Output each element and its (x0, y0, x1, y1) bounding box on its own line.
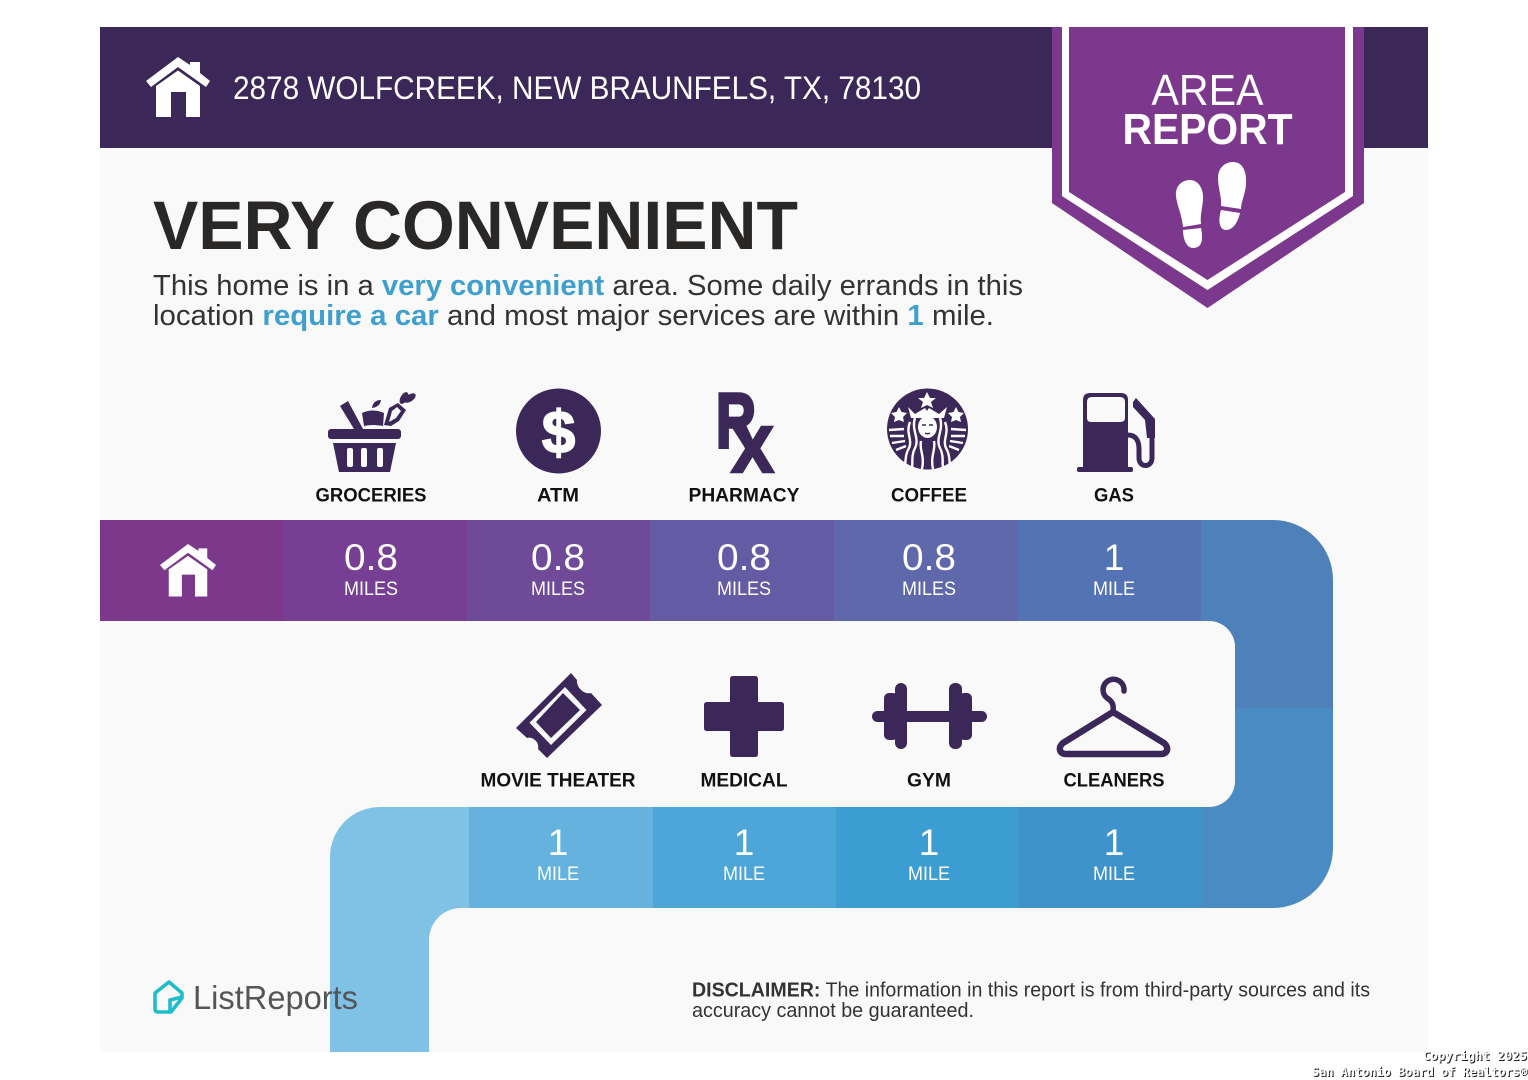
gas distance: MILE (1093, 579, 1135, 600)
atm distance (531, 537, 585, 600)
category labels: CLEANERS (1064, 770, 1164, 792)
medical distance (723, 822, 765, 885)
gym distance: 1 (919, 822, 939, 863)
icon: pharmacy rx: X (732, 414, 773, 486)
header banner (100, 27, 1428, 148)
summary text: location require a car and most major services are within 1 mile. (153, 300, 994, 332)
gym distance (908, 822, 950, 885)
groceries distance: 0.8 (344, 537, 398, 578)
icon: clothes hanger (1060, 679, 1167, 754)
icon: coffee siren logo (887, 388, 968, 470)
heading: VERY CONVENIENT (153, 187, 798, 264)
disclaimer: accuracy cannot be guaranteed. (692, 999, 974, 1022)
badge title (1122, 66, 1293, 154)
summary text (153, 270, 1023, 332)
gym distance: MILE (908, 864, 950, 885)
atm distance: MILES (531, 579, 585, 600)
movie theater distance: MILE (537, 864, 579, 885)
icon: gym dumbbell (872, 683, 987, 749)
copyright watermark: Copyright 2025 (1423, 1049, 1527, 1063)
category labels: MEDICAL (700, 770, 788, 792)
cleaners distance: MILE (1093, 864, 1135, 885)
category labels: ATM (537, 486, 579, 506)
cleaners distance (1093, 822, 1135, 885)
coffee distance (902, 537, 956, 600)
coffee distance: MILES (902, 579, 956, 600)
icon: home start marker (160, 544, 216, 596)
cleaners distance: 1 (1104, 822, 1124, 863)
coffee distance: 0.8 (902, 537, 956, 578)
icon: footprints (1176, 162, 1246, 248)
category labels: COFFEE (891, 486, 967, 506)
icon: movie ticket (516, 673, 602, 758)
gas distance (1093, 537, 1135, 600)
icon: house in header (146, 57, 210, 117)
icon: logo mark (155, 982, 182, 1012)
distances: top row (344, 537, 1135, 600)
copyright watermark (1312, 1049, 1528, 1080)
medical distance: 1 (734, 822, 754, 863)
icon: atm dollar: $ (542, 399, 575, 466)
distances: bottom row (537, 822, 1135, 885)
icon: gas pump (1077, 393, 1155, 472)
badge title: REPORT (1122, 105, 1293, 154)
disclaimer: DISCLAIMER: The information in this report is from third-party sources and its (692, 978, 1370, 1002)
category labels: PHARMACY (688, 486, 800, 506)
medical distance: MILE (723, 864, 765, 885)
movie theater distance: 1 (548, 822, 568, 863)
disclaimer (692, 978, 1370, 1022)
route band (100, 520, 1333, 1052)
pharmacy distance: 0.8 (717, 537, 771, 578)
badge title: AREA (1152, 66, 1264, 115)
icon: grocery basket (328, 391, 417, 472)
pharmacy distance (717, 537, 771, 600)
atm distance: 0.8 (531, 537, 585, 578)
copyright watermark: Copyright 2025 (1424, 1050, 1528, 1064)
logo: listreports: ListReports (193, 979, 358, 1016)
category labels: GROCERIES (316, 486, 426, 506)
movie theater distance (537, 822, 579, 885)
category labels: GYM (907, 770, 951, 792)
icon: medical cross (704, 676, 784, 757)
category labels: GAS (1094, 486, 1134, 506)
category labels (316, 486, 1164, 792)
address text: 2878 WOLFCREEK, NEW BRAUNFELS, TX, 78130 (233, 70, 921, 106)
icon: pharmacy rx: R (716, 378, 756, 464)
category labels: MOVIE THEATER (480, 770, 636, 792)
badge: area report (1052, 27, 1364, 308)
groceries distance (344, 537, 398, 600)
summary text: This home is in a very convenient area. Some daily errands in this (153, 270, 1023, 302)
pharmacy distance: MILES (717, 579, 771, 600)
groceries distance: MILES (344, 579, 398, 600)
gas distance: 1 (1104, 537, 1124, 578)
icon: atm dollar (516, 388, 601, 474)
